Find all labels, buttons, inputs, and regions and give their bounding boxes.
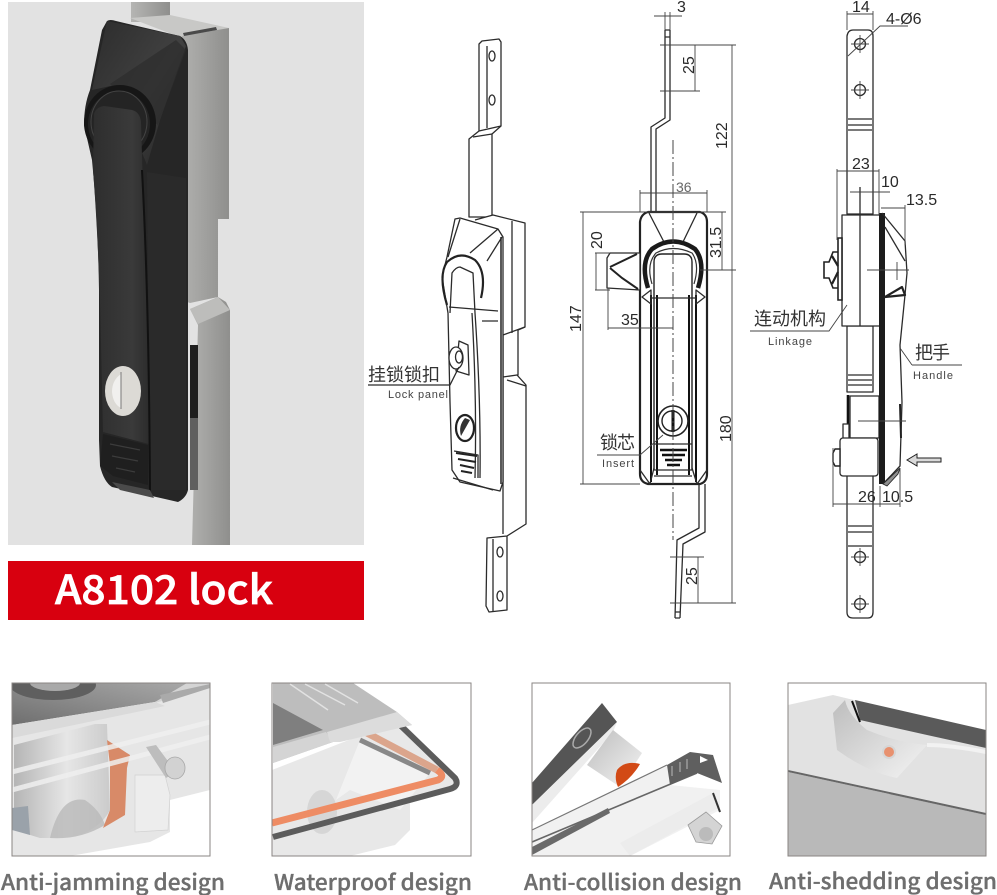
label: lock panel bbox=[368, 365, 459, 401]
dimension 31.5: 31.5 bbox=[708, 227, 725, 258]
dimension 13.5: 13.5 bbox=[906, 192, 937, 209]
dimension 20: 20 bbox=[589, 231, 606, 249]
latch grip bbox=[456, 453, 477, 473]
top metal face bbox=[273, 683, 412, 763]
lock panel english label: Lock panel bbox=[388, 389, 448, 401]
panel: waterproof detail bbox=[272, 683, 471, 856]
orange seal bbox=[103, 740, 130, 828]
pale upper seal arm bbox=[367, 733, 437, 770]
center marks bbox=[858, 262, 909, 421]
isometric line drawing bbox=[442, 39, 526, 612]
key cylinder bbox=[105, 366, 141, 416]
upper metal strap bbox=[131, 2, 170, 22]
strap outline bbox=[847, 30, 873, 214]
panel border: anti-shedding bbox=[788, 683, 986, 856]
mounting holes bbox=[851, 35, 869, 613]
handle dark face bbox=[855, 700, 986, 748]
ring collar bbox=[645, 242, 701, 288]
pin bbox=[307, 790, 337, 834]
linkage chinese label: 连动机构 bbox=[754, 309, 826, 329]
dimension 147: 147 bbox=[568, 305, 585, 332]
latch grip bbox=[660, 450, 687, 465]
panel border: anti-collision bbox=[532, 683, 730, 856]
dimension hole spec: 4-Ø6 bbox=[886, 11, 922, 28]
front view drawing bbox=[607, 30, 707, 618]
side view dimensions bbox=[750, 0, 962, 507]
translucent housing bbox=[272, 720, 460, 856]
linkage english label: Linkage bbox=[768, 336, 812, 348]
orange rivet bbox=[883, 746, 895, 758]
lock cylinder bbox=[456, 415, 474, 441]
panel border: anti-jamming bbox=[12, 683, 210, 856]
handle outline bbox=[442, 218, 503, 491]
front view dimensions bbox=[568, 0, 736, 603]
cylinder bbox=[14, 724, 110, 838]
lever bbox=[654, 254, 692, 470]
panel: product photo bbox=[8, 2, 364, 545]
dimension 25 top: 25 bbox=[681, 56, 698, 74]
linkage body bbox=[842, 215, 880, 326]
orange seal bbox=[272, 770, 442, 823]
dimension 180: 180 bbox=[718, 415, 735, 442]
panel: anti-jamming detail bbox=[10, 670, 210, 856]
lower metal strap bbox=[190, 297, 230, 545]
banner title: A8102 lock bbox=[55, 558, 273, 616]
metal linkage housing bbox=[130, 15, 229, 303]
dimension 10: 10 bbox=[881, 174, 899, 191]
insert chinese label: 锁芯 bbox=[600, 433, 635, 453]
cylinder bbox=[587, 730, 642, 787]
dimension 36: 36 bbox=[676, 179, 692, 195]
bottom latch tab bbox=[100, 444, 154, 498]
center line bbox=[672, 140, 674, 540]
lock panel chinese label: 挂锁锁扣 bbox=[368, 365, 440, 385]
side view drawing bbox=[824, 30, 941, 618]
push arrow bbox=[907, 454, 941, 466]
nut bbox=[688, 812, 722, 844]
lower plate holes bbox=[497, 547, 503, 557]
panel: anti-collision detail bbox=[532, 703, 722, 856]
top face creases bbox=[649, 213, 697, 244]
gray base bbox=[788, 772, 986, 856]
body outline bbox=[640, 212, 707, 484]
top strap bbox=[651, 30, 670, 212]
lower body bbox=[532, 765, 720, 856]
lever bbox=[93, 106, 149, 444]
gray gasket bbox=[273, 725, 457, 837]
fastener bbox=[824, 238, 842, 300]
padlock side tab bbox=[607, 253, 640, 290]
lock cylinder bbox=[658, 406, 688, 436]
linkage box and lower strap bbox=[475, 215, 526, 612]
top metal face bbox=[12, 683, 187, 725]
handle english label: Handle bbox=[913, 370, 953, 382]
collar ring bbox=[833, 700, 905, 778]
tapered top face bbox=[92, 21, 186, 165]
orange seal bbox=[616, 763, 640, 787]
translucent housing bbox=[788, 695, 986, 815]
pin bbox=[146, 745, 185, 779]
bottom strap bbox=[675, 484, 705, 618]
dimension 35: 35 bbox=[621, 312, 639, 329]
latch grip bbox=[667, 752, 722, 785]
black handle body bbox=[84, 20, 188, 502]
dimension 25 bottom: 25 bbox=[684, 567, 701, 585]
insert english label: Insert bbox=[602, 458, 634, 470]
top mounting plate and strap bbox=[469, 39, 501, 217]
dimension 23: 23 bbox=[852, 156, 870, 173]
lower bracket bbox=[850, 396, 879, 438]
panel border: waterproof bbox=[272, 683, 471, 856]
product name banner bbox=[8, 558, 364, 620]
dimension 10.5: 10.5 bbox=[882, 489, 913, 506]
handle chinese label: 把手 bbox=[915, 343, 950, 363]
panel: anti-shedding detail bbox=[788, 683, 986, 856]
padlock panel bbox=[449, 341, 469, 375]
translucent housing bbox=[12, 688, 210, 856]
handle plate bbox=[532, 703, 617, 805]
dimension 26: 26 bbox=[858, 489, 876, 506]
bracket bbox=[620, 793, 720, 856]
handle profile bbox=[879, 213, 885, 484]
handle collar ring bbox=[84, 85, 156, 153]
housing ribs bbox=[14, 744, 130, 792]
dimension 122: 122 bbox=[714, 122, 731, 149]
